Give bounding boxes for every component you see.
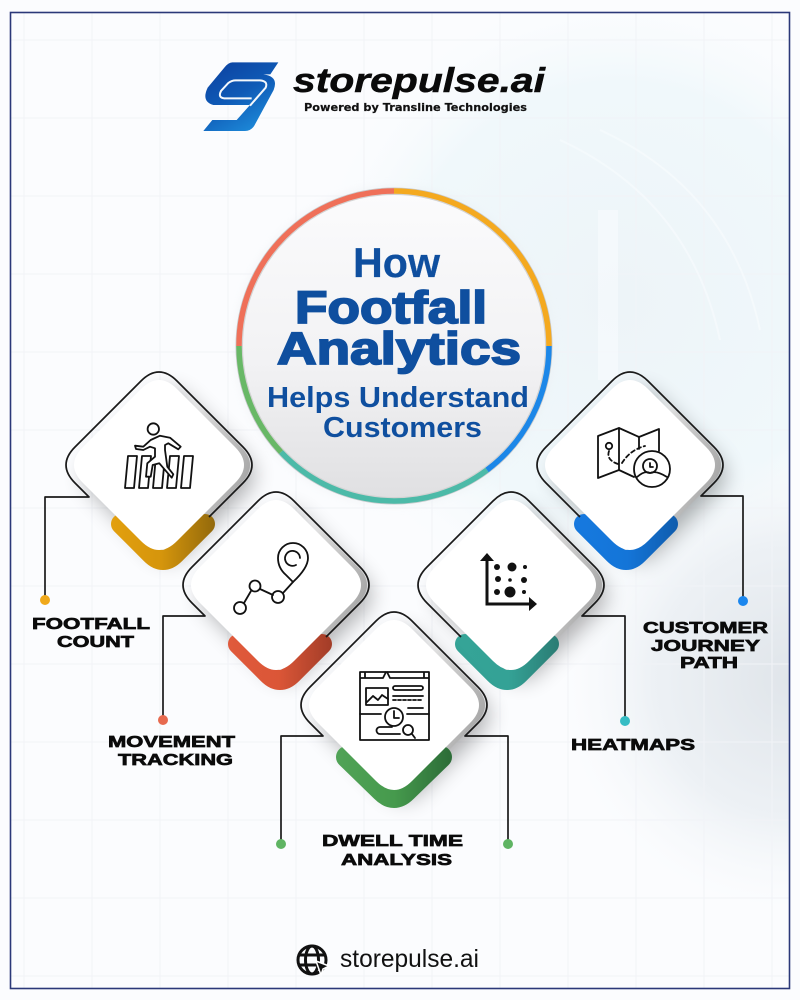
chevron: teal: [465, 644, 549, 680]
label: movement tracking: MOVEMENT: [108, 734, 235, 751]
label: customer journey path: [643, 620, 769, 672]
label: customer journey path: CUSTOMER: [643, 620, 769, 637]
dot left: [276, 839, 286, 849]
outline and leader: [163, 492, 369, 720]
dot right: [503, 839, 513, 849]
icon: map with clock: [598, 428, 670, 487]
label: footfall count: COUNT: [57, 634, 134, 651]
chevron: amber: [121, 524, 205, 560]
label: dwell time analysis: DWELL TIME: [322, 833, 463, 850]
dot: [158, 715, 168, 725]
outline and leaders: [281, 612, 508, 844]
label: footfall count: FOOTFALL: [32, 616, 150, 633]
icon: globe with cursor: [298, 946, 329, 975]
label: movement tracking: [108, 734, 235, 769]
title text: Footfall: [295, 282, 487, 333]
footer website: storepulse.ai: [340, 945, 479, 973]
label: movement tracking: TRACKING: [118, 752, 233, 769]
ring segments: [239, 191, 549, 501]
card: customer journey path: [537, 372, 748, 606]
label: dwell time analysis: [322, 833, 463, 869]
label: customer journey path: JOURNEY: [651, 638, 760, 655]
title text: How: [353, 239, 440, 286]
outline and leader: [418, 492, 625, 720]
icon: route with pin: [234, 543, 308, 614]
label: customer journey path: PATH: [680, 655, 738, 672]
title text: Customers: [323, 412, 482, 444]
outline and leader: [45, 372, 252, 600]
label: footfall count: [32, 616, 150, 651]
card: footfall count: [40, 372, 254, 605]
card: movement tracking: [158, 492, 371, 725]
icon: scatter plot: [480, 553, 537, 611]
label: heatmaps: HEATMAPS: [571, 737, 695, 754]
icon: pedestrian crossing: [125, 423, 193, 488]
dot: [738, 596, 748, 606]
dot: [40, 595, 50, 605]
logo: [203, 62, 547, 131]
dot: [620, 716, 630, 726]
card: heatmaps: [418, 492, 630, 726]
chevron: blue: [584, 524, 668, 560]
logo tagline: Powered by Transline Technologies: [304, 101, 527, 114]
title text: Analytics: [277, 323, 521, 374]
icon: dashboard with clock: [360, 672, 429, 740]
label: dwell time analysis: ANALYSIS: [341, 852, 452, 869]
chevron: red: [238, 644, 322, 680]
title text: [267, 239, 529, 444]
title text: Helps Understand: [267, 382, 529, 414]
outline and leader: [537, 372, 743, 600]
central title circle: [236, 188, 552, 504]
chevron: green: [347, 757, 441, 797]
footer: [298, 945, 479, 975]
icon: storepulse S mark: [203, 62, 278, 131]
card: dwell time analysis: [276, 612, 513, 849]
logo wordmark: storepulse.ai: [293, 62, 547, 100]
